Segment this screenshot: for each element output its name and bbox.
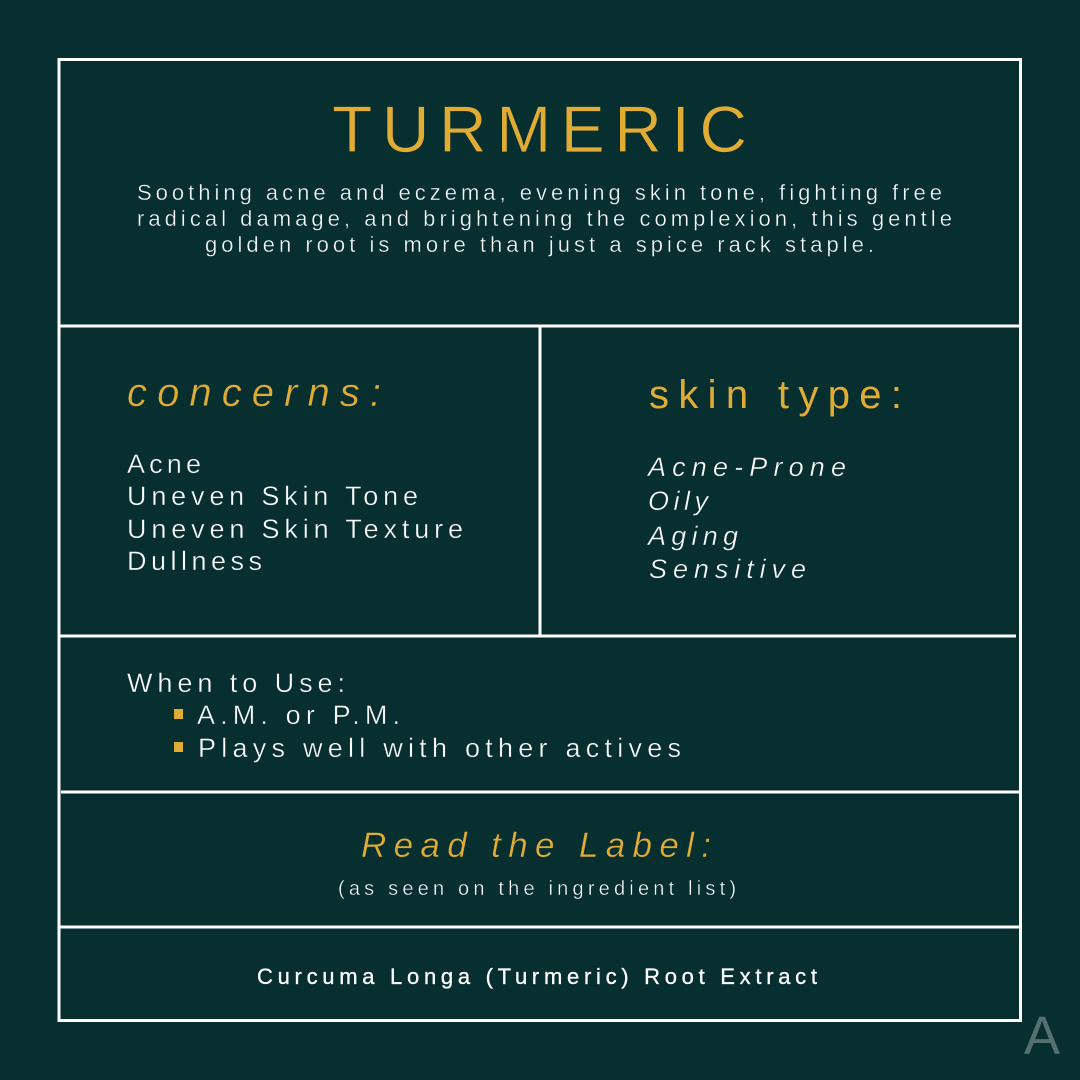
read the label subtitle: (as seen on the ingredient list) bbox=[338, 878, 736, 900]
intro paragraph bbox=[137, 180, 952, 257]
skin type list: Acne-Prone bbox=[646, 452, 846, 482]
concerns heading: concerns: bbox=[127, 371, 381, 415]
skin type heading: skin type: bbox=[649, 373, 902, 417]
panel: skin type bbox=[646, 373, 902, 584]
skin type list: Sensitive bbox=[649, 554, 806, 584]
bullet: plays well with other actives: Plays well with other actives bbox=[198, 733, 681, 763]
concerns list: Dullness bbox=[127, 546, 262, 576]
intro paragraph: Soothing acne and eczema, evening skin tone, fighting free bbox=[137, 180, 942, 205]
panel: when to use bbox=[127, 668, 681, 763]
skin type list bbox=[646, 452, 846, 584]
skin type list: Oily bbox=[648, 486, 710, 516]
skin type list: Aging bbox=[646, 521, 738, 551]
panel: concerns bbox=[127, 371, 463, 576]
panel: read the label bbox=[338, 826, 736, 900]
intro paragraph: golden root is more than just a spice rack staple. bbox=[205, 232, 874, 257]
concerns list: Uneven Skin Texture bbox=[127, 514, 463, 544]
title: TURMERIC bbox=[332, 92, 747, 166]
concerns list bbox=[127, 449, 463, 576]
bullet: A.M. or P.M.: A.M. or P.M. bbox=[197, 700, 400, 730]
outer frame and table grid bbox=[59, 60, 1020, 1020]
watermark letter: A bbox=[1024, 1006, 1060, 1066]
when to use heading: When to Use: bbox=[127, 668, 345, 698]
concerns list: Acne bbox=[127, 449, 201, 479]
read the label heading: Read the Label: bbox=[361, 826, 711, 865]
intro paragraph: radical damage, and brightening the complexion, this gentle bbox=[137, 206, 952, 231]
ingredient name: Curcuma Longa (Turmeric) Root Extract bbox=[257, 964, 817, 989]
concerns list: Uneven Skin Tone bbox=[127, 481, 418, 511]
